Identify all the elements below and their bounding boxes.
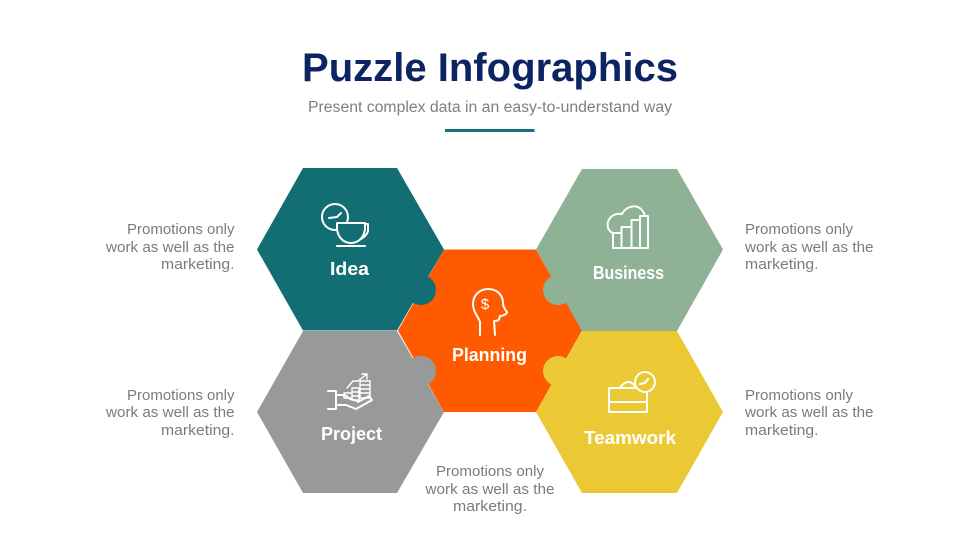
icon: hand with coins xyxy=(328,374,372,409)
icon: head with dollar sign: $ xyxy=(481,296,490,313)
label: project: Project xyxy=(321,424,382,444)
label: planning: Planning xyxy=(452,345,527,365)
icon: head with dollar sign xyxy=(473,289,507,335)
text block: planning description: work as well as the xyxy=(424,481,554,498)
icon: clock and cup xyxy=(322,204,368,246)
text block: business description: marketing. xyxy=(745,256,818,273)
text block: idea description xyxy=(105,221,235,273)
text block: planning description: Promotions only xyxy=(436,463,544,480)
text block: teamwork description: work as well as the xyxy=(744,404,874,421)
text block: teamwork description xyxy=(744,387,874,439)
text block: teamwork description: Promotions only xyxy=(745,387,853,404)
text block: business description: Promotions only xyxy=(745,221,853,238)
text block: project description: work as well as the xyxy=(105,404,234,421)
icon: cloud and bar chart xyxy=(608,206,648,248)
text block: planning description: marketing. xyxy=(453,498,527,515)
panel: planning hexagon xyxy=(398,250,582,412)
text block: planning description xyxy=(424,463,554,515)
label: business: Business xyxy=(593,263,664,283)
subtitle: Present complex data in an easy-to-understand way xyxy=(308,99,672,116)
text block: idea description: Promotions only xyxy=(127,221,235,238)
text block: teamwork description: marketing. xyxy=(745,422,818,439)
panel: idea hexagon xyxy=(257,168,444,330)
panel: teamwork hexagon xyxy=(536,331,723,493)
text block: project description: Promotions only xyxy=(127,387,235,404)
title underline xyxy=(445,129,534,132)
label: teamwork: Teamwork xyxy=(584,428,677,448)
text block: idea description: work as well as the xyxy=(105,239,234,256)
text block: idea description: marketing. xyxy=(161,256,234,273)
text block: business description: work as well as the xyxy=(744,239,874,256)
text block: project description xyxy=(105,387,235,439)
label: idea: Idea xyxy=(330,259,370,279)
title: Puzzle Infographics xyxy=(302,46,678,90)
panel: business hexagon xyxy=(536,169,723,331)
icon: cake and clock xyxy=(609,372,655,412)
text block: project description: marketing. xyxy=(161,422,234,439)
text block: business description xyxy=(744,221,874,273)
panel: project hexagon xyxy=(257,331,444,493)
